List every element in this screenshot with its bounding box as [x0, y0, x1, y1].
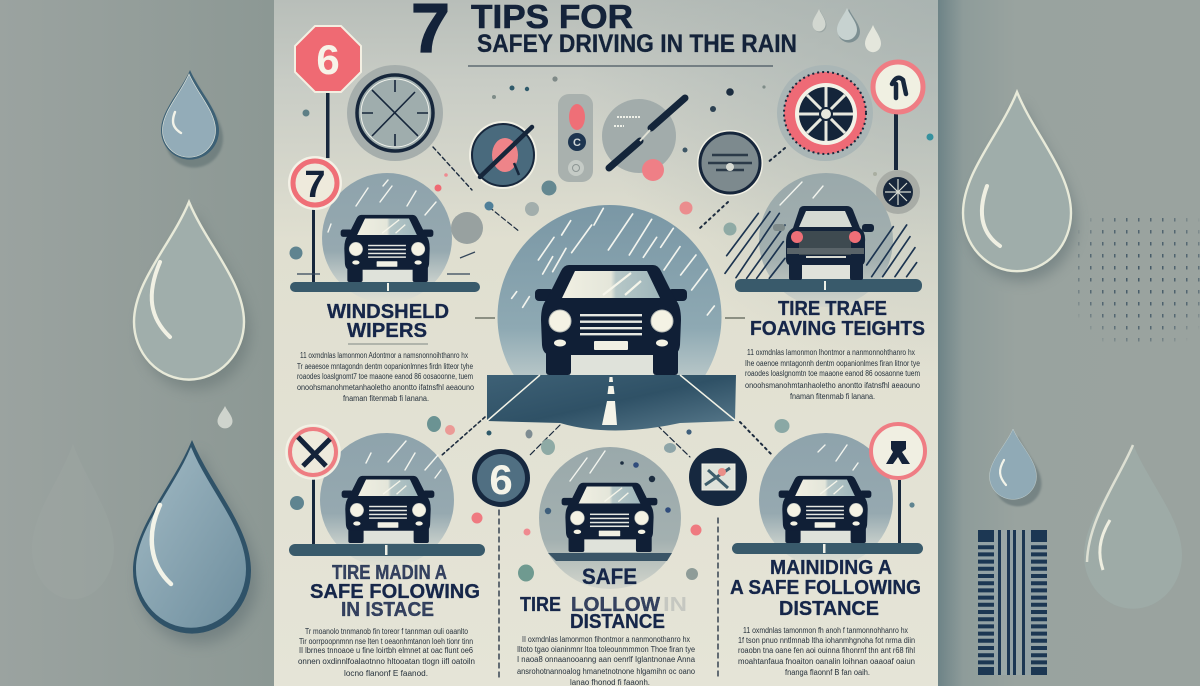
- heading: bottom right: MAINIDING A: [770, 557, 892, 579]
- decorative connector lines: [433, 147, 785, 680]
- icon: small tread badge: [876, 170, 920, 214]
- icon: wiper blade circle: [469, 121, 537, 189]
- section: windshield wipers car: [290, 173, 483, 303]
- section: tire car: [725, 173, 922, 307]
- text block: bottom right: 11 oxmdnlas tamonmon fh anoh f tanmonnohhanro hx: [743, 626, 908, 635]
- central car: [535, 265, 687, 375]
- central rain dome: [498, 205, 722, 429]
- icon: small blue water drop, right: [990, 429, 1042, 506]
- heading: windshield wipers: WIPERS: [347, 320, 427, 342]
- text block: bottom right: moahtanfaua fnoaiton oanalin loihnan oaaoaf oaiun: [738, 657, 915, 666]
- heading: tire section: [750, 298, 925, 340]
- text block: bottom left: onnen oxdinnlfoalaotnno hltooatan tlogn iifl oatoiln: [298, 657, 475, 666]
- section: following distance car, bottom right: [732, 433, 923, 567]
- text block: tire section: 11 oxmdnlas lamonmon lhontmor a nanmonnohthanro hx: [747, 348, 915, 357]
- title: [411, 0, 797, 67]
- heading: bottom left: TIRE MADIN A: [332, 562, 447, 584]
- text block: bottom middle: [517, 635, 696, 686]
- icon: large clear water drop, left: [134, 202, 250, 390]
- central road: [487, 375, 736, 430]
- icon: small blue water drop, upper left: [161, 70, 223, 168]
- icon: pale ghost water drop, lower right: [1084, 444, 1182, 609]
- heading: safe tire following distance: [520, 564, 687, 633]
- heading: bottom right: DISTANCE: [779, 598, 879, 620]
- text block: bottom right: [738, 626, 915, 677]
- title: SAFEY DRIVING IN THE RAIN: [477, 30, 797, 58]
- icon: number 6 badge: 6: [489, 456, 513, 503]
- heading: safe tire following distance: SAFE: [582, 564, 637, 589]
- section: safe car, bottom middle: [539, 447, 681, 589]
- text block: tire section: roaodes loaslgnomtn toe maaone eanod 86 oosaonne tuem: [745, 369, 920, 378]
- icon: wiper blades circle: [602, 98, 685, 181]
- text block: bottom left: locno flanonf E faanod.: [344, 669, 428, 678]
- heading: safe tire following distance: IN: [663, 594, 687, 616]
- text block: bottom middle: ansrohotnannoalog hmanetnotnone hlgamihn oc oano: [517, 667, 696, 676]
- heading: safe tire following distance: LOLLOW: [571, 594, 660, 616]
- heading: bottom left: IN ISTACE: [341, 599, 434, 621]
- heading: windshield wipers: [327, 301, 449, 342]
- heading: bottom right: A SAFE FOLLOWING: [730, 577, 921, 599]
- section: following distance car, bottom left: [289, 433, 485, 567]
- text block: tire section: [745, 348, 921, 401]
- rear view car: [773, 206, 874, 280]
- text block: tire section: Ihe oaenoe mntagonnh dentm oopanionlmes firan litnor tye: [745, 359, 920, 368]
- icon: large clear water drop, upper right: [963, 92, 1076, 281]
- icon: large blue water drop, left: [133, 440, 257, 644]
- text block: windshield wipers: Tr aeaesoe mntagondn dentm oopanionlmnes firdn litteor tyhe: [297, 362, 473, 371]
- icon: wiper gauge dial: [347, 65, 443, 161]
- central car illustration: [487, 205, 736, 430]
- text block: tire section: onoohsmanohmtanhaoletho anontto ifatnsfhl aeaouno: [745, 381, 921, 390]
- heading: tire section: TIRE TRAFE: [778, 298, 887, 320]
- icon: prohibition sign: [286, 425, 340, 479]
- text block: bottom left: Tr moanolo tnnmanob fin toreor f tannman ouli oaanlto: [305, 627, 468, 636]
- heading: tire section: FOAVING TEIGHTS: [750, 318, 925, 340]
- text block: windshield wipers: roaodes loaslgnomt7 toe maaone eanod 86 oosaoonne, tuem: [297, 372, 473, 381]
- text block: bottom left: II lbrnes tnnoaoe u fine loirtbh elmnet at oac flunt oe6: [299, 646, 473, 655]
- icon: stop sign with number 6: 6: [316, 36, 340, 83]
- icon: number 7 sign: 7: [304, 164, 326, 206]
- text block: bottom middle: I naoa8 onnaanooanng aan oenrlf Iglantnonae Anna: [517, 655, 696, 664]
- icon: faded ghost water drop, left: [32, 444, 114, 599]
- icon: traffic light panel: C: [573, 137, 581, 149]
- text block: windshield wipers: 11 oxmdnlas lamonmon Adontmor a namsnonnoihthanro hx: [300, 351, 468, 360]
- icon: map badge: [689, 448, 747, 506]
- icon: number 7 sign: [288, 156, 342, 210]
- central rain streaks: [512, 208, 714, 315]
- decorative colored dots: [290, 76, 934, 582]
- text block: bottom left: Tir oorrpoopnmnn nse lten t oeaonhmtanon loeh tionr tinn: [299, 637, 473, 646]
- text block: bottom middle: II oxmdnlas lamonmon fihontmor a nanmonothanro hx: [522, 635, 690, 644]
- text block: windshield wipers: fnaman fitenmab fi lanana.: [343, 394, 429, 403]
- text block: windshield wipers: [297, 344, 474, 403]
- icon: traffic light panel: [558, 94, 593, 182]
- icon: tiny water drop, left: [218, 406, 232, 428]
- heading: bottom right: [730, 557, 921, 620]
- icon: tire with pink wall: [777, 65, 873, 161]
- icon: sign with road symbol: [871, 424, 925, 478]
- icon: stop sign with number 6: [295, 26, 361, 158]
- icon: round sign top right: [873, 62, 923, 170]
- text block: bottom right: fnanga flaonnf B fan oaih.: [785, 668, 870, 677]
- heading: bottom left: SAFE FOLOWING: [310, 581, 480, 603]
- icon: number 6 badge: [472, 449, 530, 507]
- icon: tire tread pattern: [978, 530, 1047, 675]
- icon: halftone dot grid, right: [1078, 218, 1200, 342]
- icon: windshield view badge: [697, 130, 763, 196]
- panel: central infographic sheet: [274, 0, 938, 686]
- text block: tire section: fnaman fitenmab fi lanana.: [790, 392, 875, 401]
- icon: diagonal rain hatching: [725, 212, 917, 278]
- heading: safe tire following distance: TIRE: [520, 594, 561, 616]
- panel: right background: [937, 0, 1200, 686]
- panel: left background: [0, 0, 275, 686]
- text block: bottom right: 1f tson pnuo nntlmnab ltha iohanmhgnoha fot nrma diin: [738, 636, 915, 645]
- text block: windshield wipers: onoohsmanohmetanhaoletho anontto ifatnsfhl aeaouno: [297, 383, 474, 392]
- heading: safe tire following distance: DISTANCE: [570, 611, 665, 633]
- text block: bottom left: [298, 627, 475, 678]
- heading: windshield wipers: WINDSHELD: [327, 301, 449, 323]
- text block: bottom middle: Iltoto tgao oianinmnr ltoa toleounmmmon Thoe firan tye: [517, 645, 695, 654]
- heading: bottom left: [310, 562, 480, 621]
- icon: three small drops near title: [812, 8, 881, 52]
- text block: bottom right: roaobn tna oane fen aoi ouinna fihonrnf thn ant r68 fihl: [738, 646, 915, 655]
